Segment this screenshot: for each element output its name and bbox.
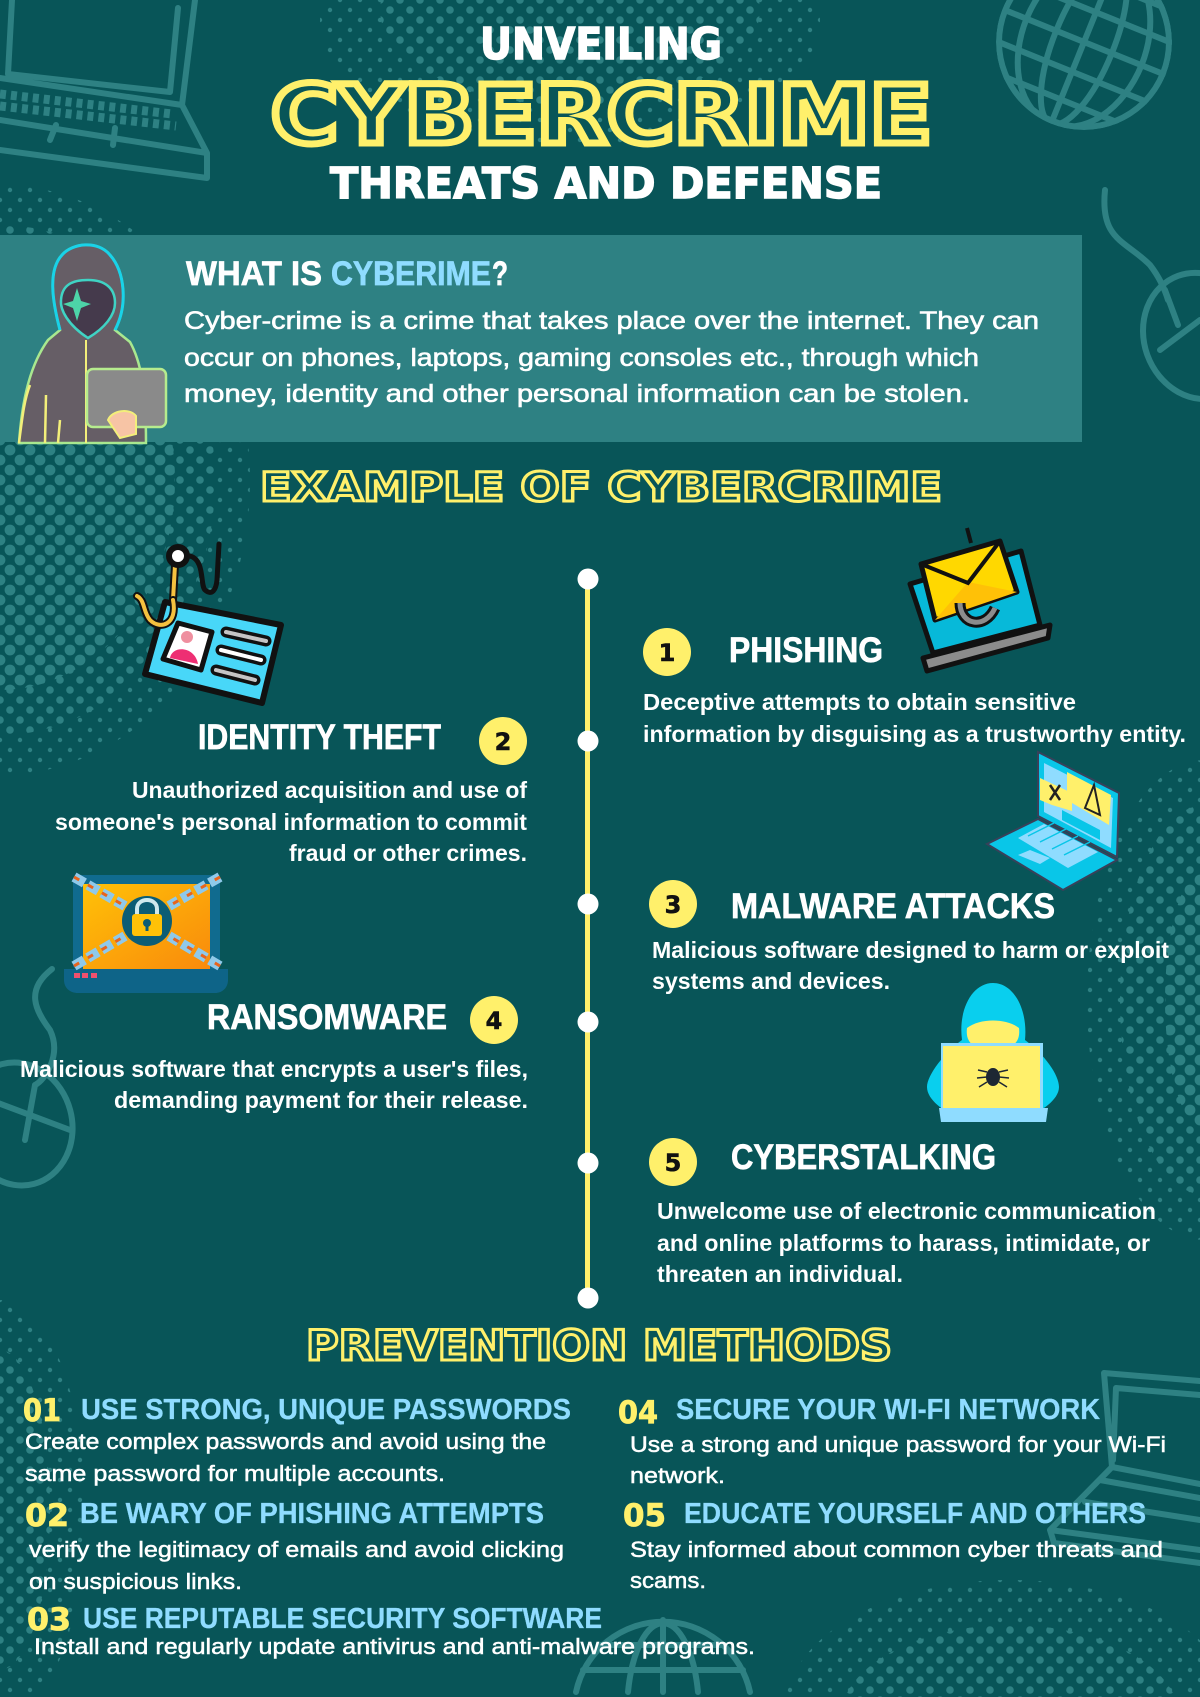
icon: hooded hacker (19, 245, 166, 443)
example: cyberstalking: Unwelcome use of electronic communication (657, 1198, 1156, 1224)
decoration: laptop bottom right (1050, 1373, 1200, 1563)
halftone dots: bottom left (0, 1300, 85, 1697)
method 02: on suspicious links. (29, 1569, 242, 1594)
method 05 (623, 1498, 1163, 1593)
example: ransomware: RANSOMWARE (207, 998, 447, 1037)
panel heading: ? (492, 255, 508, 293)
badge 4: 4 (486, 1007, 502, 1035)
method 05: Stay informed about common cyber threats and (630, 1537, 1163, 1562)
method 04: 04 (618, 1395, 658, 1431)
method 05: scams. (630, 1568, 706, 1593)
example: identity theft: fraud or other crimes. (289, 840, 527, 866)
badge 5 (649, 1138, 697, 1186)
title: unveiling: UNVEILING (480, 19, 722, 70)
method 02: 02 (25, 1498, 69, 1534)
halftone dots: top (320, 0, 820, 145)
method 05: EDUCATE YOURSELF AND OTHERS (684, 1498, 1146, 1530)
method 03: Install and regularly update antivirus and anti-malware programs. (34, 1634, 755, 1659)
panel description: occur on phones, laptops, gaming consoles etc., through which (184, 344, 979, 372)
method 04: SECURE YOUR WI-FI NETWORK (676, 1394, 1100, 1426)
panel description: money, identity and other personal information can be stolen. (184, 380, 970, 408)
badge 2 (479, 717, 527, 765)
example: ransomware: Malicious software that encrypts a user's files, (20, 1056, 528, 1082)
decoration: mouse right (1104, 190, 1200, 415)
example: phishing: PHISHING (729, 631, 883, 670)
icon: phishing id card (137, 544, 281, 703)
example: malware attacks: Malicious software designed to harm or exploit (652, 937, 1169, 963)
icon: phishing email laptop (910, 528, 1050, 671)
method 03: USE REPUTABLE SECURITY SOFTWARE (83, 1603, 602, 1635)
decoration: mouse left (0, 969, 86, 1198)
timeline (578, 568, 598, 1308)
example: cyberstalking: threaten an individual. (657, 1261, 903, 1287)
example: malware attacks (649, 880, 1169, 994)
subtitle: THREATS AND DEFENSE (330, 159, 882, 209)
example: identity theft: IDENTITY THEFT (198, 718, 441, 757)
example: ransomware (20, 996, 528, 1113)
example: malware attacks: systems and devices. (652, 968, 890, 994)
decoration: globe bottom (576, 1620, 750, 1692)
badge 1 (643, 628, 691, 676)
method 01: same password for multiple accounts. (25, 1461, 445, 1486)
method 03: 03 (27, 1602, 71, 1638)
heading: example of cybercrime: EXAMPLE OF CYBERCRIME (260, 465, 942, 511)
panel heading: WHAT IS (186, 255, 322, 293)
example: cyberstalking: and online platforms to harass, intimidate, or (657, 1230, 1150, 1256)
badge 1: 1 (659, 639, 675, 667)
method 04 (618, 1394, 1166, 1488)
panel description (184, 307, 1039, 408)
method 02: verify the legitimacy of emails and avoid clicking (29, 1537, 564, 1562)
method 01: USE STRONG, UNIQUE PASSWORDS (81, 1394, 571, 1426)
method 04: network. (630, 1463, 725, 1488)
example: identity theft (55, 717, 527, 866)
method 01: Create complex passwords and avoid using the (25, 1429, 546, 1454)
icon: malware laptop (987, 752, 1119, 890)
badge 4 (470, 996, 518, 1044)
panel heading: CYBERIME (331, 255, 491, 293)
method 02 (25, 1498, 564, 1594)
decoration: globe top right (996, 0, 1172, 130)
example: malware attacks: MALWARE ATTACKS (731, 887, 1055, 926)
example: phishing: information by disguising as a trustworthy entity. (643, 721, 1186, 747)
badge 3 (649, 880, 697, 928)
panel description: Cyber-crime is a crime that takes place over the internet. They can (184, 307, 1039, 335)
heading: prevention methods: PREVENTION METHODS (306, 1321, 892, 1370)
icon: hacker with laptop (927, 983, 1059, 1122)
example: phishing: Deceptive attempts to obtain sensitive (643, 689, 1076, 715)
method 01: 01 (23, 1393, 61, 1429)
halftone dots: right (1087, 760, 1200, 1240)
decoration: laptop top left (0, 0, 207, 178)
method 05: 05 (623, 1498, 666, 1534)
method 03 (27, 1602, 755, 1659)
example: identity theft: Unauthorized acquisition and use of (132, 777, 527, 803)
badge 3: 3 (665, 891, 681, 919)
method 04: Use a strong and unique password for your Wi-Fi (630, 1432, 1166, 1457)
method 02: BE WARY OF PHISHING ATTEMPTS (80, 1498, 544, 1530)
example: phishing (643, 628, 1186, 747)
example: cyberstalking (649, 1138, 1156, 1287)
title: cybercrime: CYBERCRIME (271, 69, 932, 163)
badge 5: 5 (665, 1149, 681, 1177)
icon: ransomware laptop (64, 875, 228, 993)
badge 2: 2 (495, 728, 511, 756)
halftone dots: left (0, 185, 250, 775)
example: ransomware: demanding payment for their release. (114, 1087, 528, 1113)
halftone dots: bottom right (785, 1580, 1200, 1697)
example: identity theft: someone's personal information to commit (55, 809, 527, 835)
method 01 (23, 1393, 571, 1486)
panel heading (186, 255, 508, 293)
example: cyberstalking: CYBERSTALKING (731, 1138, 996, 1177)
